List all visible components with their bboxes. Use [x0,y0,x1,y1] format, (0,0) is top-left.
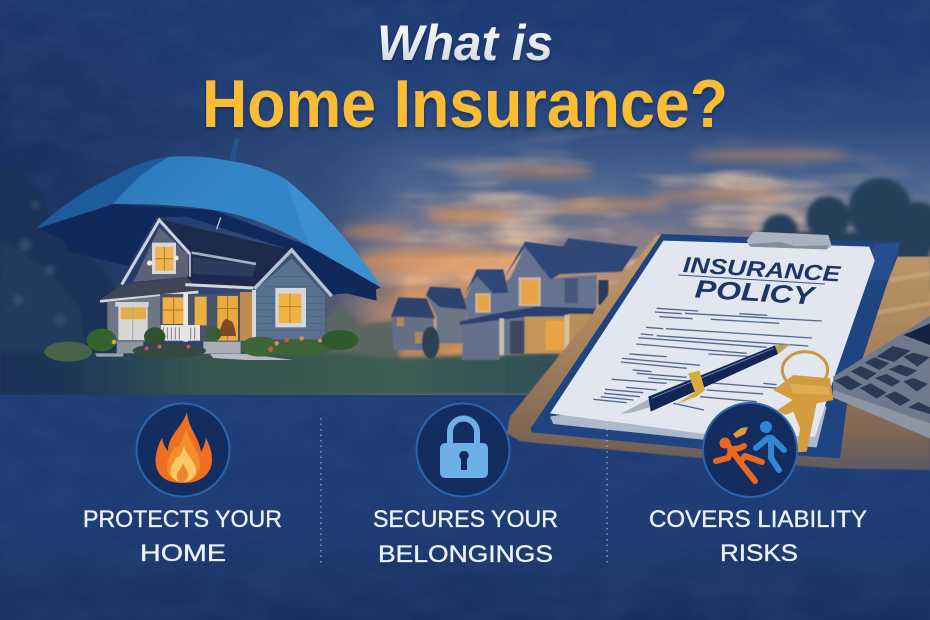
label: secures your belongings: BELONGINGS [378,541,553,568]
keys [773,352,833,452]
label: protects your home [83,506,282,567]
label: covers liability risks: RISKS [720,540,798,567]
title line: What is: What is [377,15,553,71]
near house [459,238,638,360]
title line: Home Insurance?: Home Insurance? [202,66,728,142]
paper sheet [550,241,875,447]
wooden table [507,235,930,470]
clipboard and policy document [531,232,930,458]
lower panel [0,395,930,620]
shrubs [44,327,358,362]
porch windows [163,297,185,324]
sunset clouds [340,149,850,276]
upper gable [133,227,188,282]
house [44,219,358,362]
flowers [112,336,322,352]
far house 2 [426,287,467,343]
neighbouring houses [391,238,638,360]
far house 1 [391,297,435,350]
window right [275,288,306,327]
steps [203,342,241,354]
central roof [160,219,292,287]
umbrella underside [37,204,381,301]
clipboard board [531,234,900,458]
icon: liability slip and fall [703,403,797,497]
garage [115,302,149,307]
dark conifer [422,327,439,359]
icon: umbrella sheltering house [37,139,381,362]
porch railing [161,325,200,341]
umbrella canopy [37,156,381,287]
text: INSURANCE POLICY [682,252,843,311]
lawn [0,350,560,396]
policy text lines [593,308,822,410]
background: evening sky [0,0,930,396]
icon: fire [136,404,230,496]
label: secures your belongings [373,506,558,568]
trees: left dark foliage [0,168,130,395]
orange figure [716,440,762,481]
metal clip [747,232,832,249]
umbrella ferrule [229,139,239,163]
pen [621,344,791,414]
blue figure [756,424,784,470]
trees: middle distance [325,305,400,365]
title [202,15,728,142]
label: protects your home: PROTECTS YOUR [83,506,282,533]
lower roof [100,277,198,302]
text: INSURANCE POLICY: POLICY [694,275,817,311]
calculator [833,316,930,438]
label: covers liability risks [649,506,867,567]
lower walls [107,296,160,342]
right wing [256,258,325,339]
label: covers liability risks: COVERS LIABILITY [649,506,867,533]
trees: right distant foliage [760,178,930,292]
label: protects your home: HOME [140,540,226,567]
dividers [321,418,607,566]
icon: padlock [416,404,510,496]
text: INSURANCE POLICY: INSURANCE [682,252,843,287]
label: secures your belongings: SECURES YOUR [373,506,558,533]
